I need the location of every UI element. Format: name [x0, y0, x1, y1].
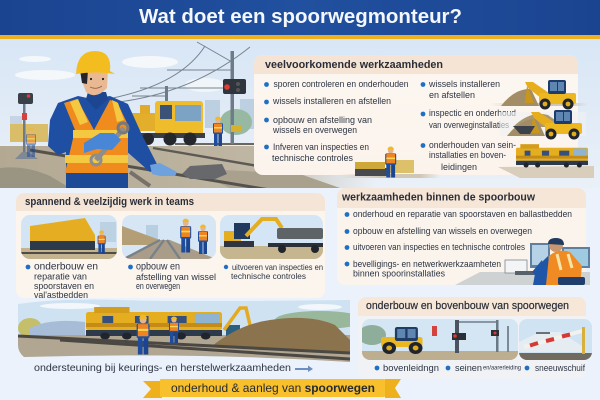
column 2 text: opbouw en	[136, 262, 180, 272]
column 3 text: technische controles	[231, 271, 306, 281]
gloves	[84, 133, 121, 153]
icon: track machine	[498, 144, 594, 178]
yellow truck	[130, 101, 205, 146]
ballast pile	[182, 164, 227, 179]
overhead lines	[108, 42, 250, 103]
panel: maintenance train strip	[18, 300, 350, 362]
image: level crossing barrier	[519, 319, 592, 360]
rails	[30, 144, 270, 190]
signal mast right	[223, 51, 246, 144]
worker in cab doorway	[169, 316, 179, 343]
title banner	[0, 0, 600, 39]
list: left column: Infveren van inspecties en	[273, 142, 369, 152]
list: left column: opbouw en afstelling van	[273, 115, 372, 125]
labels: bovenleidngn	[383, 363, 439, 374]
icon: worker with machine	[340, 147, 440, 178]
panel: onderbouw en bovenbouw van spoorwegen	[358, 297, 592, 379]
column 1 text: onderbouw en	[34, 262, 98, 272]
list: bevelligings- en netwerkwerkzaamheten	[353, 259, 501, 269]
heading: werkzaamheden binnen de spoorbouw	[341, 192, 535, 204]
list: left column	[264, 79, 408, 163]
excavator	[224, 308, 250, 336]
labels: sneeuwschuif	[535, 363, 585, 374]
title banner: Wat doet een spoorwegmonteur?	[139, 6, 462, 28]
column 1 text: val'astbedden	[34, 290, 88, 300]
list: opbouw en afstelling van wissels en overwegen	[353, 226, 532, 236]
icon: loader with soil	[490, 80, 588, 110]
labels: seinen	[455, 363, 482, 374]
column 1 text: spoorstaven en	[34, 281, 94, 291]
image: excavator with wagon	[220, 215, 323, 259]
list: right column: installaties en boven-	[429, 150, 506, 160]
soil heap	[212, 318, 350, 352]
panel: spannend & veelzijdig werk in teams	[16, 193, 325, 300]
long yellow track machine	[86, 307, 222, 340]
column 3 text: uitvoeren van inspecties en	[232, 262, 323, 272]
image: loader and signal	[358, 319, 518, 360]
list: right column: en afstellen	[429, 90, 475, 100]
ribbon footer: onderhoud & aanleg van spoorwegen	[171, 381, 375, 395]
column 1 text: reparatie van	[34, 272, 87, 282]
panel: werkzaamheden binnen de spoorbouw	[337, 188, 590, 285]
column 2 text: afstelling van wissel	[136, 272, 216, 282]
gravel ground	[0, 146, 375, 188]
arrow	[295, 366, 313, 372]
list: left column: wissels en overwegen	[272, 125, 357, 135]
background buildings and trees	[10, 99, 256, 142]
labels: en/aarerleiding	[483, 366, 521, 372]
list: binnen spoorinstallaties	[353, 268, 445, 278]
list: left column: wissels installeren en afstellen	[272, 96, 391, 106]
list: left column: technische controles	[272, 153, 353, 163]
list: onderhoud en reparatie van spoorstaven en ballastbedden	[353, 209, 572, 219]
heading: onderbouw en bovenbouw van spoorwegen	[366, 300, 569, 312]
worker with orange vest	[137, 315, 150, 354]
list: right column: van overweginstallaties	[429, 120, 509, 130]
hero illustration: railway scene	[0, 39, 600, 190]
ribbon footer	[143, 379, 401, 398]
list: right column: leidingen	[441, 162, 477, 172]
panel: veelvoorkomende werkzaamheden	[254, 55, 594, 178]
labels	[375, 363, 585, 374]
list: right column	[421, 79, 516, 172]
heading: spannend & veelzijdig werk in teams	[25, 196, 194, 208]
list: left column: sporen controleren en onderhouden	[274, 79, 408, 89]
list: uitvoeren van inspecties en technische controles	[353, 242, 525, 252]
column 2 text	[128, 262, 216, 291]
signal left	[15, 93, 38, 159]
list: right column: inspectic en onderhoud	[429, 108, 516, 118]
image: track machine and worker	[21, 215, 117, 259]
heading: veelvoorkomende werkzaamheden	[265, 59, 443, 71]
column 1 text	[26, 262, 98, 300]
image: two workers on track	[122, 215, 216, 259]
list: right column: wissels installeren	[428, 79, 500, 89]
column 2 text: en overwegen	[136, 281, 180, 291]
image: operator at control desk	[455, 238, 590, 285]
icon: loader with ballast	[500, 110, 586, 140]
wrench	[96, 128, 124, 160]
list: right column: onderhouden van sein-	[429, 140, 516, 150]
main worker	[48, 51, 177, 188]
caption with arrow: ondersteuning bij keurings- en herstelwerkzaamheden	[34, 362, 291, 374]
column 3 text	[224, 262, 323, 281]
list	[345, 209, 572, 278]
small worker by truck	[213, 116, 223, 146]
